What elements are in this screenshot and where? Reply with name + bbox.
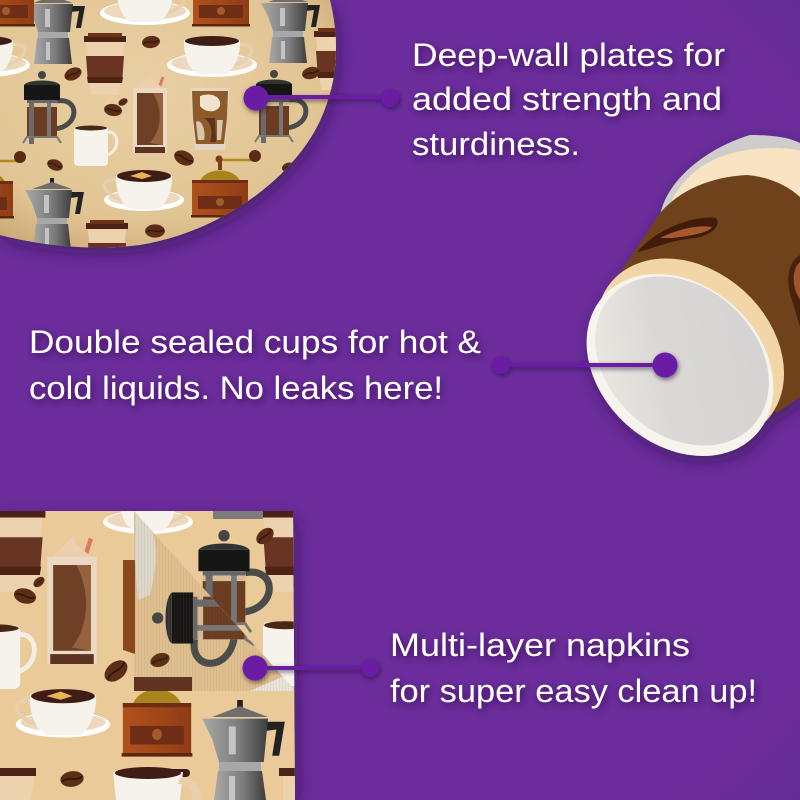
panel: plate pattern photo bbox=[0, 0, 356, 282]
callout: plate pointer bbox=[244, 86, 399, 110]
panel: napkin photo bbox=[0, 493, 319, 800]
cup brown sleeve bbox=[612, 175, 800, 413]
text: cup feature: Double sealed cups for hot & bbox=[29, 324, 481, 360]
cup base rim bbox=[550, 237, 800, 493]
text: plate feature: added strength and bbox=[412, 81, 722, 117]
text: napkin feature bbox=[390, 627, 757, 709]
cup cream top band bbox=[672, 148, 800, 240]
callout: napkin pointer bbox=[242, 656, 379, 680]
callout: cup pointer bbox=[492, 352, 678, 378]
cup lower cream band bbox=[559, 221, 800, 479]
cup base disk bbox=[561, 242, 800, 480]
sleeve bean marks bbox=[637, 217, 800, 327]
cup grey lid rim bbox=[660, 135, 800, 240]
text: cup feature bbox=[29, 324, 481, 406]
text: napkin feature: for super easy clean up! bbox=[390, 673, 757, 709]
text: cup feature: cold liquids. No leaks here! bbox=[29, 370, 443, 406]
text: plate feature: Deep-wall plates for bbox=[412, 37, 725, 73]
panel: cup photo bbox=[550, 135, 800, 493]
text: plate feature bbox=[412, 37, 725, 162]
text: plate feature: sturdiness. bbox=[412, 126, 580, 162]
text: napkin feature: Multi-layer napkins bbox=[390, 627, 690, 663]
folded napkin flap bbox=[134, 511, 294, 691]
